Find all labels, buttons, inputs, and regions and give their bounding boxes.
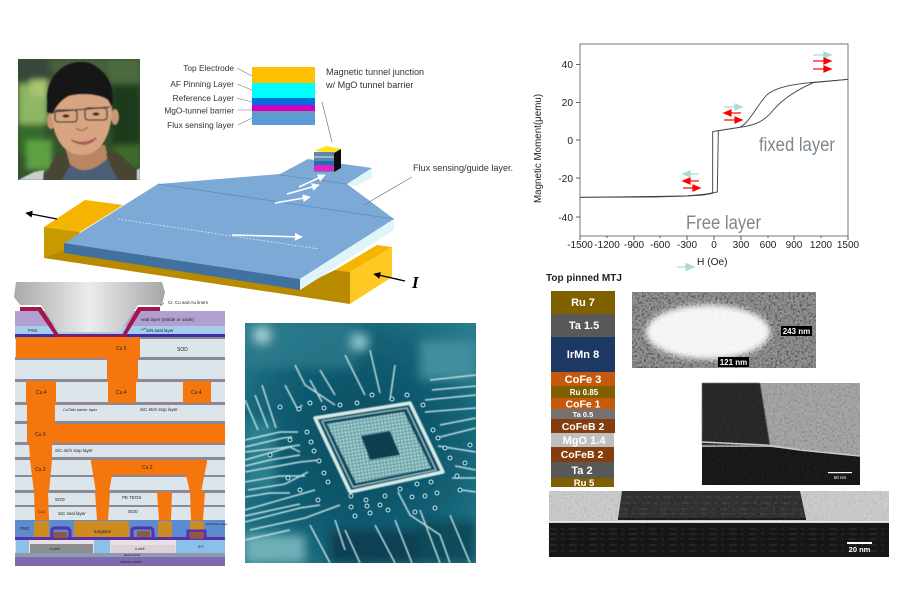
x axis labels: 1200 <box>810 240 833 251</box>
label 243 nm: 243 nm <box>783 327 810 336</box>
layer labels: PSG <box>28 328 38 333</box>
layer Ru 5: Ru 5 <box>574 478 595 489</box>
layer labels: Cu 3 <box>35 432 46 438</box>
layer labels: Cu/TaN barrier layer <box>63 408 98 412</box>
layer Ta 1.5: Ta 1.5 <box>569 320 599 332</box>
layer labels: tungsten <box>94 529 112 534</box>
layer Ru 7 <box>551 291 615 314</box>
layer labels: n-well <box>50 547 60 551</box>
MTJ layer stack <box>252 67 315 125</box>
layer labels: SOD <box>177 347 188 353</box>
layer CoFe 3: CoFe 3 <box>565 374 601 386</box>
substrate background <box>15 311 225 566</box>
MTJ layer labels: Top Electrode <box>183 63 234 73</box>
device layer <box>15 520 225 540</box>
y axis labels: 20 <box>562 98 573 109</box>
substrate wells <box>15 540 225 566</box>
layer labels: Cu 5 <box>116 346 127 352</box>
label 121 nm: 121 nm <box>720 358 747 367</box>
heading: top pinned MTJ: Top pinned MTJ <box>546 273 622 284</box>
y axis labels: -20 <box>558 174 573 185</box>
layer IrMn 8 <box>551 337 615 372</box>
x axis labels <box>567 240 860 251</box>
layer labels: SiN seal layer <box>146 328 174 333</box>
current arrow left <box>26 213 57 219</box>
layer labels: SOD <box>128 509 139 514</box>
pads <box>268 393 472 518</box>
y axis labels <box>558 60 573 224</box>
layer labels: PSG <box>20 526 30 531</box>
layer labels: carbon wafer <box>120 560 143 564</box>
scale bar 20 nm: 20 nm <box>849 545 871 554</box>
layer labels: n-well <box>135 547 145 551</box>
scale bar 50 nm <box>828 472 852 480</box>
left yellow conductor <box>44 200 123 258</box>
x axis labels: -600 <box>650 240 670 251</box>
callout: flux guide label: Flux sensing/guide layer. <box>413 163 513 173</box>
chart: hysteresis loop <box>533 44 860 270</box>
MTJ pillar <box>314 146 341 172</box>
right yellow conductor <box>44 245 392 304</box>
MTJ layer labels: Reference Layer <box>173 93 234 103</box>
MTJ layer labels: MgO-tunnel barrier <box>164 106 234 116</box>
x axis labels: -900 <box>624 240 644 251</box>
layer labels: Cr, Cu and Au liners <box>168 300 209 305</box>
layer CoFeB 2 <box>551 419 615 433</box>
layer labels: Cu 2 <box>142 465 153 471</box>
layer labels: Cu 4 <box>116 390 127 396</box>
layer Ta 0.5: Ta 0.5 <box>573 410 593 419</box>
layer labels: STI <box>198 545 204 549</box>
layer labels: SOD <box>55 497 66 502</box>
layer CoFeB 2: CoFeB 2 <box>562 421 604 433</box>
hysteresis curves <box>580 79 848 197</box>
y axis labels: 40 <box>562 60 573 71</box>
x axis labels: 0 <box>711 240 717 251</box>
x axis labels: -300 <box>677 240 697 251</box>
copper interconnects <box>16 337 225 520</box>
chip package <box>315 403 443 492</box>
x axis labels: 900 <box>786 240 803 251</box>
layer CoFe 3 <box>551 372 615 386</box>
layer Ru 7: Ru 7 <box>571 297 595 309</box>
callout: MTJ label <box>322 67 424 142</box>
spin arrows <box>677 52 831 270</box>
layer Ru 0.85 <box>551 386 615 398</box>
layer CoFeB 2 lower <box>551 447 614 462</box>
callout: MTJ label: w/ MgO tunnel barrier <box>325 80 413 90</box>
layer labels: Cu 4 <box>36 390 47 396</box>
x axis labels: 600 <box>760 240 777 251</box>
x axis title: H (Oe) <box>697 257 728 268</box>
layer MgO 1.4 <box>551 433 614 447</box>
layer Ta 1.5 <box>551 314 615 337</box>
white field arrows <box>232 175 325 237</box>
layer Ta 2: Ta 2 <box>571 465 593 477</box>
x axis labels: -1500 <box>567 240 593 251</box>
layer labels: Buried SiO2 <box>124 553 141 557</box>
layer CoFe 1 <box>551 398 615 410</box>
solder bump <box>14 282 165 337</box>
scale bar 50 nm: 50 nm <box>834 475 847 480</box>
layer labels: SiN barrier layer <box>206 522 228 526</box>
y axis title: Magnetic Moment(μemu) <box>533 94 544 203</box>
callout: flux guide label <box>364 163 513 205</box>
layer Ru 5 <box>551 478 614 489</box>
plot frame <box>576 44 848 240</box>
layer labels: Cu 2 <box>35 467 46 473</box>
current arrow right <box>374 274 405 281</box>
y axis labels: 0 <box>567 136 573 147</box>
layer CoFeB 2 lower: CoFeB 2 <box>561 449 603 461</box>
layer labels: Cu1 <box>38 510 45 514</box>
blue flux sensing sheet <box>64 159 394 290</box>
passivation layers <box>15 311 225 337</box>
image: circuit board chip <box>245 323 476 563</box>
layer MgO 1.4: MgO 1.4 <box>563 435 606 447</box>
layer labels: SiC etch stop layer <box>140 407 178 412</box>
layer labels: PE TEOS <box>122 495 141 500</box>
panel: portrait photo <box>18 59 140 180</box>
current label: I <box>411 273 420 292</box>
image: SEM ellipse <box>632 292 816 368</box>
layer IrMn 8: IrMn 8 <box>567 349 599 361</box>
annotation: fixed layer: fixed layer <box>759 135 836 156</box>
x axis labels: -1200 <box>594 240 620 251</box>
layer Ta 0.5 <box>551 409 615 419</box>
y axis labels: -40 <box>558 213 573 224</box>
diagram: chip interconnect cross-section <box>14 282 228 566</box>
MTJ layer labels: AF Pinning Layer <box>170 79 234 89</box>
panel: MTJ film stack <box>551 291 615 489</box>
image: TEM close-up <box>702 383 860 485</box>
layer labels: Cu 4 <box>191 390 202 396</box>
layer Ta 2 <box>551 462 614 478</box>
x axis labels: 1500 <box>837 240 860 251</box>
callout: MTJ label: Magnetic tunnel junction <box>326 67 424 77</box>
frame marks <box>141 303 164 330</box>
layer labels: seal layer (nitride or oxide) <box>141 317 195 322</box>
dielectric barrier stripes <box>15 337 225 507</box>
image: TEM wide view <box>549 491 889 557</box>
MTJ layer labels <box>164 63 252 130</box>
MTJ layer labels: Flux sensing layer <box>167 120 234 130</box>
diagram: flux guide device <box>26 63 513 304</box>
layer labels: SiC seal layer <box>58 511 86 516</box>
layer Ru 0.85: Ru 0.85 <box>570 388 599 397</box>
layer CoFe 1: CoFe 1 <box>565 398 601 410</box>
x axis labels: 300 <box>733 240 750 251</box>
annotation: free layer: Free layer <box>686 213 762 234</box>
layer labels <box>20 300 228 564</box>
layer labels: SiC etch stop layer <box>55 448 93 453</box>
scale bar 20 nm <box>847 542 872 554</box>
traces <box>245 350 476 563</box>
